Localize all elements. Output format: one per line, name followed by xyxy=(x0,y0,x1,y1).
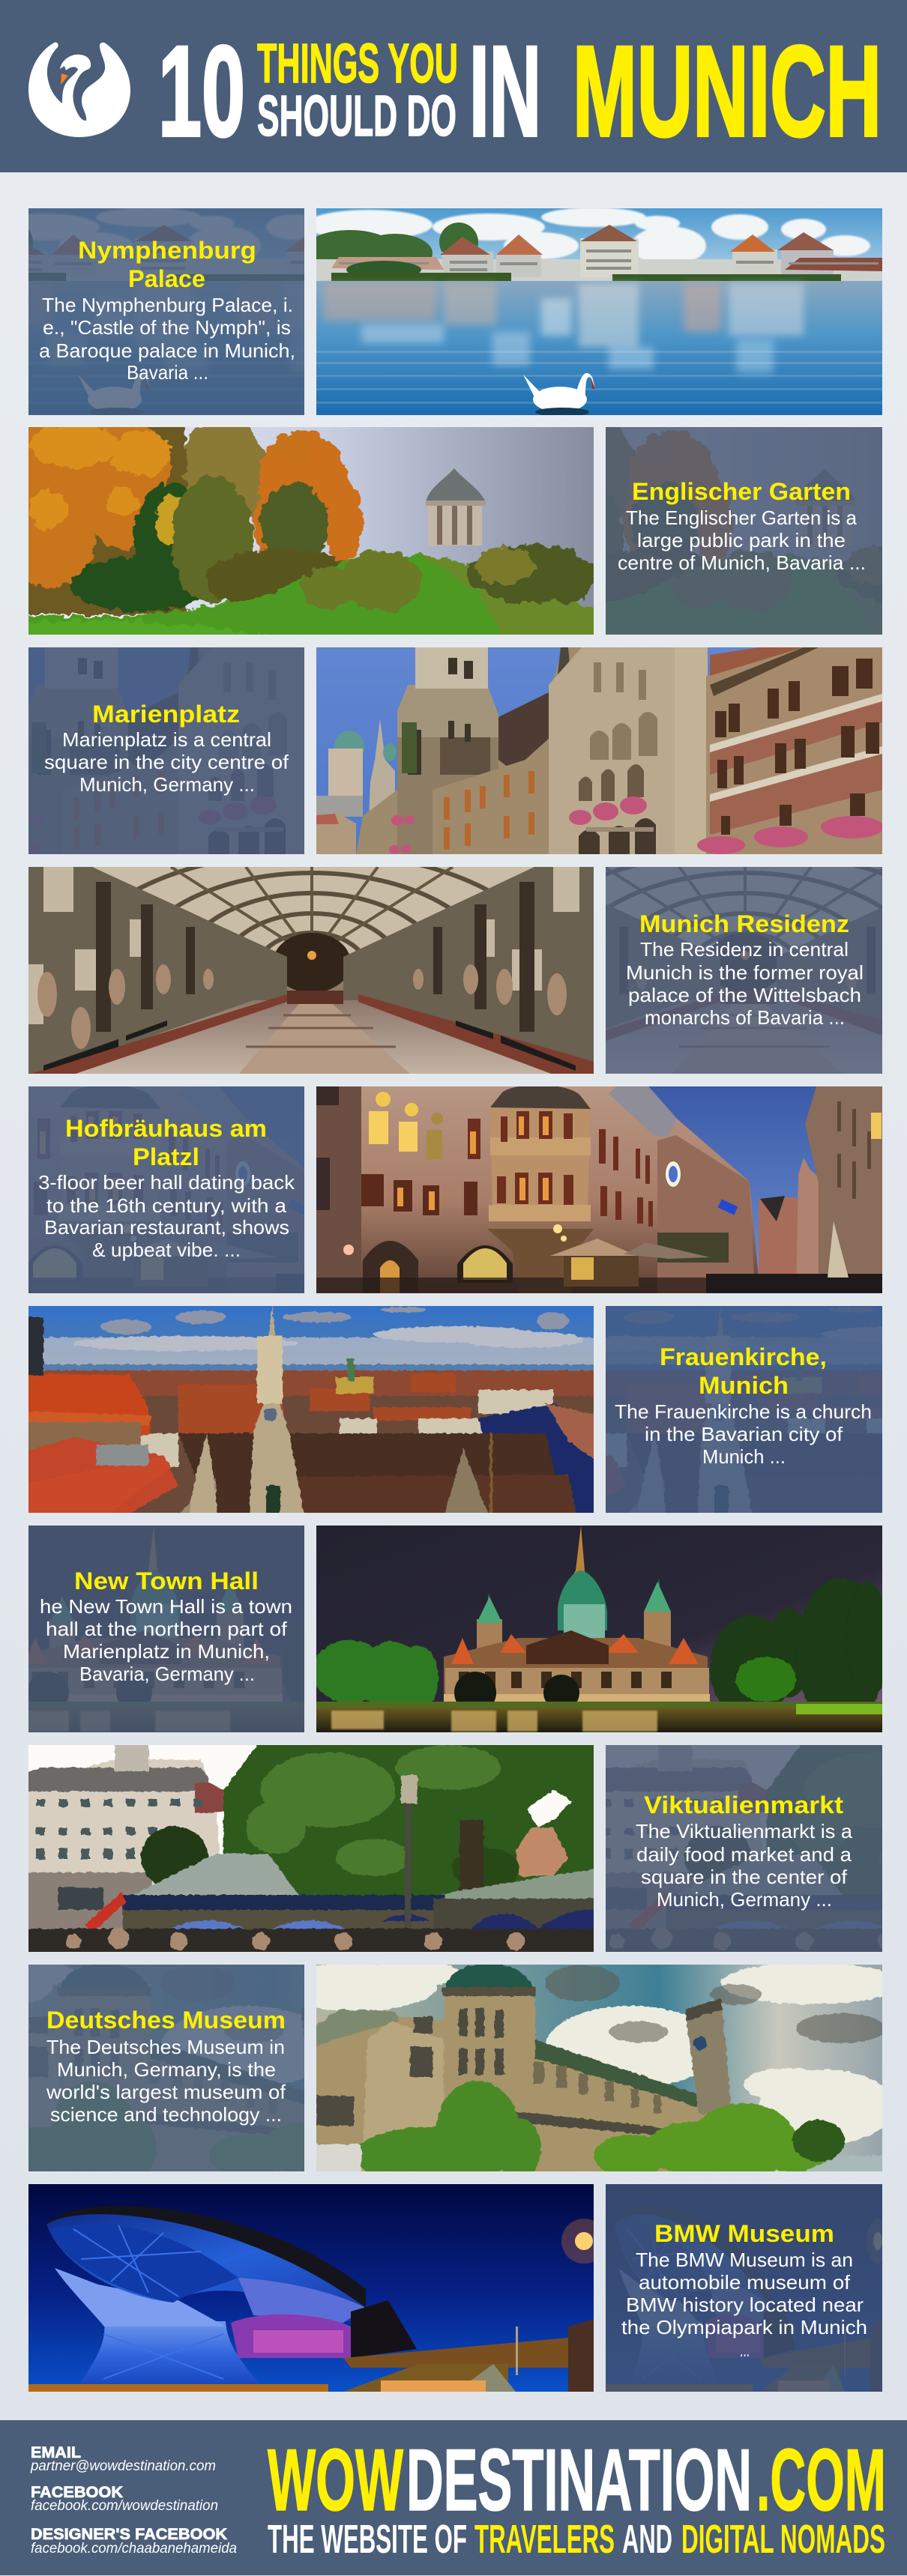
panel: Viktualienmarkt: Viktualienmarkt xyxy=(644,1792,843,1818)
row 1: Nymphenburg Palace xyxy=(0,208,882,417)
row 8: Viktualienmarkt xyxy=(13,1730,907,1968)
photo: New Town Hall xyxy=(316,1526,882,1732)
panel: BMW Museum: BMW Museum xyxy=(654,2220,834,2247)
photo: Munich Residenz xyxy=(28,867,594,1074)
title: 10: 10 xyxy=(158,19,245,163)
tagline: THE WEBSITE OF xyxy=(268,2517,467,2562)
row 6: Frauenkirche, Munich xyxy=(13,1291,907,1529)
panel: BMW Museum: The BMW Museum is an xyxy=(636,2249,853,2271)
panel: Hofbräuhaus am Platzl: Platzl xyxy=(133,1143,199,1170)
panel: BMW Museum: ... xyxy=(740,2338,750,2361)
row 2: Englischer Garten xyxy=(6,412,907,650)
tagline xyxy=(268,2517,885,2562)
panel: Marienplatz: Marienplatz xyxy=(92,701,240,728)
panel: Marienplatz xyxy=(0,647,513,855)
panel: Hofbräuhaus am Platzl: to the 16th century, with a xyxy=(46,1194,287,1217)
row 9: Deutsches Museum xyxy=(0,1950,901,2187)
panel: New Town Hall: Marienplatz in Munich, xyxy=(63,1640,270,1663)
panel: Frauenkirche, Munich xyxy=(462,1291,907,1529)
panel: Nymphenburg Palace: Nymphenburg xyxy=(78,237,256,264)
panel: Hofbräuhaus am Platzl: Bavarian restaurant, shows xyxy=(44,1216,289,1239)
website name: WOW xyxy=(268,2431,403,2529)
panel: Deutsches Museum: The Deutsches Museum in xyxy=(46,2036,285,2058)
photo: BMW Museum xyxy=(28,2184,594,2392)
panel: Nymphenburg Palace xyxy=(0,208,437,417)
contact: designer's facebook xyxy=(31,2526,237,2557)
panel: Munich Residenz: Munich Residenz xyxy=(639,910,849,937)
panel: Munich Residenz: The Residenz in central xyxy=(640,938,849,961)
panel: Frauenkirche, Munich: The Frauenkirche is a church xyxy=(615,1400,872,1423)
panel: BMW Museum: the Olympiapark in Munich xyxy=(621,2316,867,2338)
panel: Frauenkirche, Munich: Frauenkirche, xyxy=(660,1343,827,1370)
photo: Hofbräuhaus am Platzl xyxy=(316,1086,882,1293)
contact: designer's facebook: DESIGNER'S FACEBOOK xyxy=(31,2526,227,2543)
photo: Frauenkirche xyxy=(28,1306,594,1513)
panel: New Town Hall: Bavaria, Germany ... xyxy=(79,1663,255,1685)
photo: Nymphenburg Palace xyxy=(316,208,882,415)
panel: Munich Residenz: monarchs of Bavaria ... xyxy=(645,1006,845,1029)
panel: Munich Residenz: Munich is the former royal xyxy=(626,961,864,984)
icon: swan logo xyxy=(28,42,130,137)
panel: Deutsches Museum: Munich, Germany, is the xyxy=(57,2058,276,2081)
panel: Marienplatz: square in the city centre of xyxy=(44,751,289,773)
panel: Nymphenburg Palace: The Nymphenburg Palace, i. xyxy=(42,294,293,316)
contact: email: partner@wowdestination.com xyxy=(30,2458,216,2474)
panel: Nymphenburg Palace: Palace xyxy=(128,265,205,292)
panel: Munich Residenz xyxy=(462,852,907,1092)
panel: Deutsches Museum xyxy=(0,1950,516,2187)
panel: Nymphenburg Palace: a Baroque palace in Munich, xyxy=(39,339,295,362)
row 5: Hofbräuhaus am Platzl xyxy=(0,1085,882,1294)
panel: Deutsches Museum: science and technology ... xyxy=(50,2103,282,2126)
panel: BMW Museum: BMW history located near xyxy=(626,2294,864,2316)
panel: Frauenkirche, Munich: Munich xyxy=(699,1372,789,1399)
panel: Englischer Garten: large public park in the xyxy=(637,529,846,551)
panel: Viktualienmarkt xyxy=(557,1730,907,1968)
panel: Marienplatz: Munich, Germany ... xyxy=(79,773,255,796)
contact: facebook xyxy=(31,2484,218,2514)
panel: Englischer Garten: centre of Munich, Bavaria ... xyxy=(618,551,866,574)
title: things you: THINGS YOU xyxy=(257,32,458,94)
tagline: AND xyxy=(622,2517,672,2562)
title: should do: SHOULD DO xyxy=(257,84,456,148)
panel: New Town Hall xyxy=(0,1526,461,1733)
panel: New Town Hall: New Town Hall xyxy=(74,1567,259,1594)
panel: Deutsches Museum: Deutsches Museum xyxy=(46,2007,286,2034)
panel: Nymphenburg Palace: Bavaria ... xyxy=(127,361,208,384)
panel: Frauenkirche, Munich: Munich ... xyxy=(702,1445,786,1468)
panel: Frauenkirche, Munich: in the Bavarian city of xyxy=(645,1423,843,1445)
panel: BMW Museum xyxy=(606,2184,889,2392)
panel: Hofbräuhaus am Platzl: Hofbräuhaus am xyxy=(65,1115,267,1142)
panel: Englischer Garten: Englischer Garten xyxy=(632,478,851,505)
panel: Marienplatz: Marienplatz is a central xyxy=(62,728,271,751)
panel: New Town Hall: he New Town Hall is a town xyxy=(40,1595,292,1618)
row 7: New Town Hall xyxy=(0,1526,888,1733)
contact: email: EMAIL xyxy=(31,2444,81,2461)
row 10: BMW Museum xyxy=(28,2184,889,2392)
panel: Hofbräuhaus am Platzl xyxy=(0,1085,452,1294)
panel: Viktualienmarkt: square in the center of xyxy=(641,1866,848,1888)
title: in: IN xyxy=(469,19,541,163)
contact: designer's facebook: facebook.com/chaabanehameida xyxy=(31,2541,237,2557)
panel: Viktualienmarkt: The Viktualienmarkt is a xyxy=(636,1820,853,1842)
panel: New Town Hall: hall at the northern part of xyxy=(46,1618,288,1640)
header banner xyxy=(0,0,907,172)
photo: Englischer Garten xyxy=(28,427,594,635)
panel: Englischer Garten xyxy=(376,412,907,650)
photo: Marienplatz xyxy=(316,647,882,854)
contact: facebook: facebook.com/wowdestination xyxy=(31,2498,218,2514)
contact: email xyxy=(30,2444,216,2474)
panel: Deutsches Museum: world's largest museum of xyxy=(46,2081,286,2103)
panel: Hofbräuhaus am Platzl: & upbeat vibe. ... xyxy=(92,1239,241,1261)
panel: BMW Museum: automobile museum of xyxy=(639,2271,851,2294)
photo: Deutsches Museum xyxy=(316,1965,882,2171)
panel: Nymphenburg Palace: e., "Castle of the Nymph", is xyxy=(43,316,291,339)
row 4: Munich Residenz xyxy=(28,852,907,1092)
photo: Viktualienmarkt xyxy=(28,1745,594,1952)
panel: Viktualienmarkt: daily food market and a xyxy=(636,1843,852,1866)
panel: Englischer Garten: The Englischer Garten is a xyxy=(626,507,858,529)
panel: Viktualienmarkt: Munich, Germany ... xyxy=(657,1888,832,1911)
row 3: Marienplatz xyxy=(0,647,884,855)
footer banner xyxy=(0,2420,907,2575)
panel: Hofbräuhaus am Platzl: 3-floor beer hall dating back xyxy=(38,1171,295,1194)
panel: Munich Residenz: palace of the Wittelsbach xyxy=(628,984,861,1006)
tagline: TRAVELERS xyxy=(474,2517,615,2562)
contact: facebook: FACEBOOK xyxy=(31,2484,123,2501)
